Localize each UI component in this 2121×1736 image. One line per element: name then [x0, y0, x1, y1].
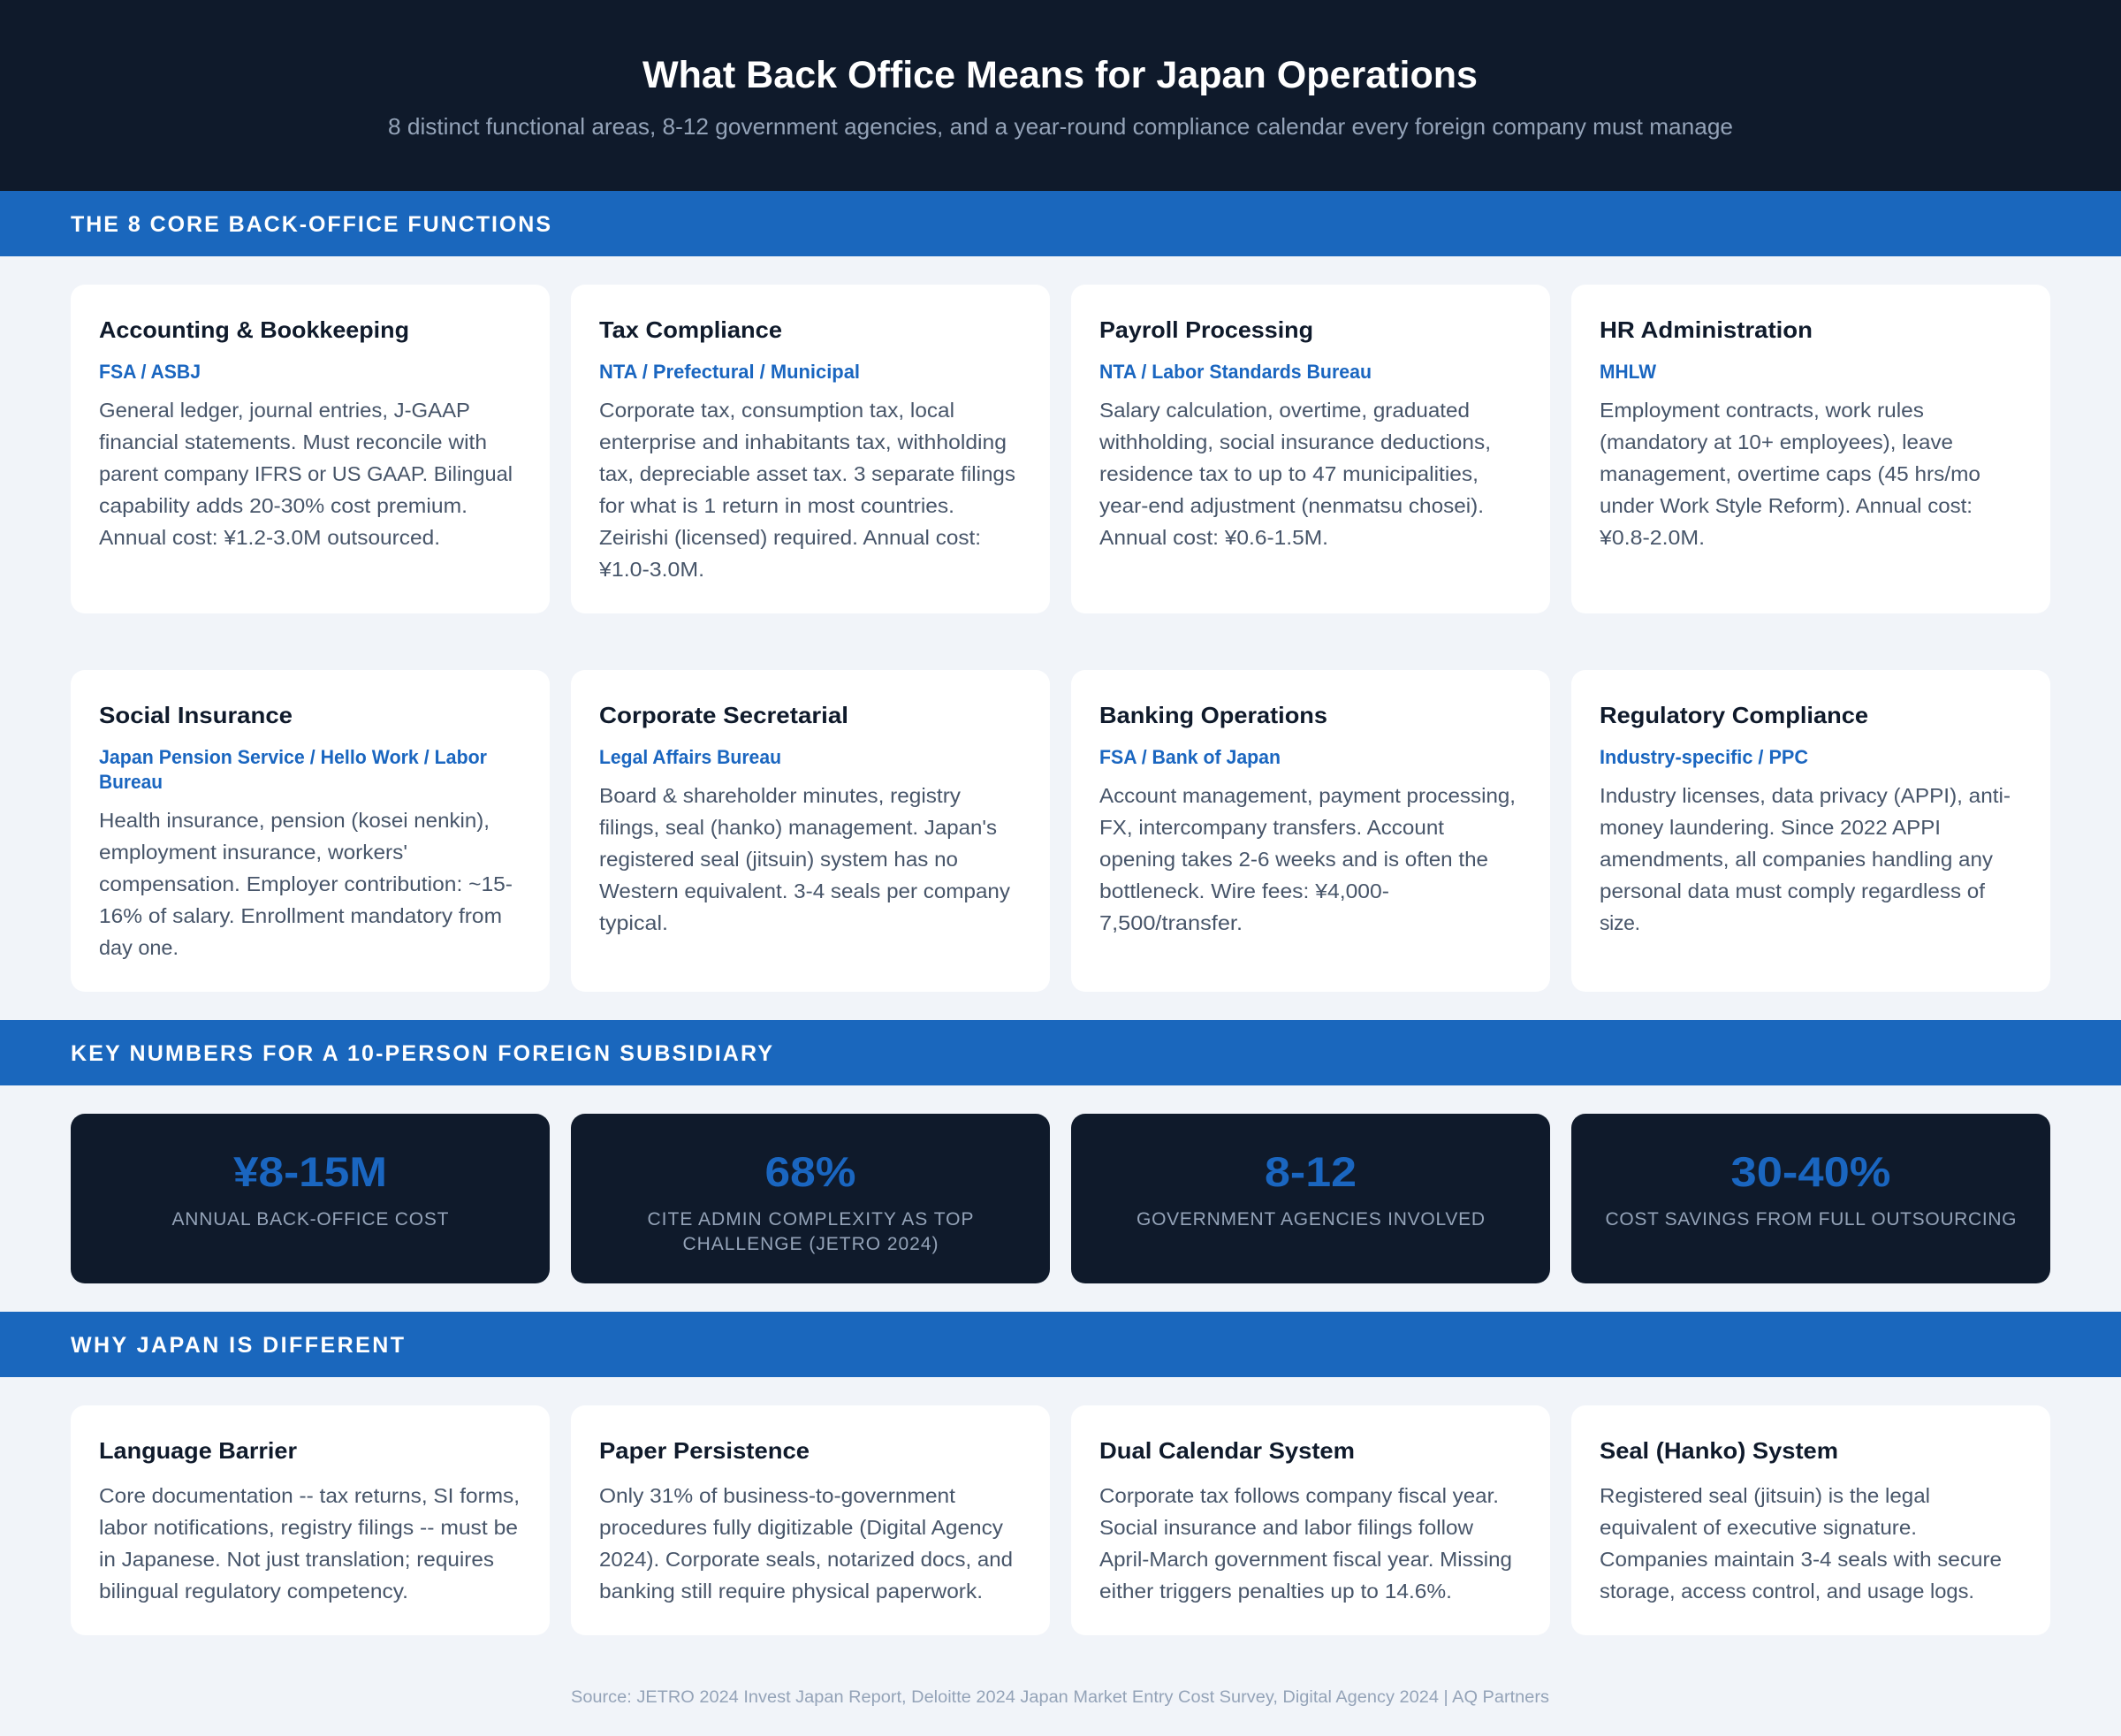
card body: money laundering. Since 2022 APPI: [1600, 816, 1941, 839]
card body: personal data must comply regardless of: [1600, 879, 1986, 902]
card body: April-March government fiscal year. Missing: [1099, 1548, 1512, 1571]
panel: paper persistence: [571, 1405, 1050, 1635]
agency tag: Legal Affairs Bureau: [599, 746, 781, 768]
card body: day one.: [99, 936, 179, 959]
card body: opening takes 2-6 weeks and is often the: [1099, 848, 1488, 871]
header banner: [0, 0, 2121, 191]
stat value: ¥8-15M: [233, 1148, 387, 1195]
section heading: why japan is different: [0, 1312, 2121, 1377]
agency tag: Japan Pension Service / Hello Work / Labor: [99, 746, 487, 768]
card body: 7,500/transfer.: [1099, 911, 1243, 934]
panel: tax compliance: [571, 285, 1050, 613]
card body: amendments, all companies handling any: [1600, 848, 1994, 871]
card body: Zeirishi (licensed) required. Annual cost:: [599, 526, 981, 549]
card body: Only 31% of business-to-government: [599, 1484, 956, 1507]
card body: tax, depreciable asset tax. 3 separate filings: [599, 462, 1015, 485]
stat label: COST SAVINGS FROM FULL OUTSOURCING: [1605, 1209, 2017, 1230]
card title: Accounting & Bookkeeping: [99, 316, 409, 343]
title: What Back Office Means for Japan Operations: [642, 54, 1478, 96]
card body: employment insurance, workers': [99, 841, 407, 864]
card body: financial statements. Must reconcile with: [99, 430, 487, 453]
card body: (mandatory at 10+ employees), leave: [1600, 430, 1953, 453]
card body: [1599, 399, 1980, 549]
panel: seal (hanko) system: [1571, 1405, 2050, 1635]
card body: size.: [1600, 911, 1640, 934]
stat value: 8-12: [1265, 1148, 1357, 1195]
stat card: cost savings: [1571, 1114, 2050, 1283]
card body: Western equivalent. 3-4 seals per company: [599, 879, 1011, 902]
card body: withholding, social insurance deductions,: [1099, 430, 1491, 453]
card title: Banking Operations: [1099, 702, 1327, 728]
panel: dual calendar system: [1071, 1405, 1550, 1635]
agency tag: Bureau: [99, 771, 163, 793]
stat label: [647, 1209, 974, 1254]
card body: Account management, payment processing,: [1099, 784, 1516, 807]
card body: Core documentation -- tax returns, SI forms,: [99, 1484, 520, 1507]
card title: Tax Compliance: [599, 316, 782, 343]
stat label: ANNUAL BACK-OFFICE COST: [171, 1209, 449, 1230]
card body: Companies maintain 3-4 seals with secure: [1600, 1548, 2002, 1571]
card title: Language Barrier: [99, 1437, 297, 1464]
card body: [99, 809, 513, 959]
card body: [599, 784, 1011, 934]
card body: 2024). Corporate seals, notarized docs, and: [599, 1548, 1013, 1571]
card body: equivalent of executive signature.: [1600, 1516, 1917, 1539]
stat card: government agencies: [1071, 1114, 1550, 1283]
card body: procedures fully digitizable (Digital Agency: [599, 1516, 1004, 1539]
agency tag: FSA / ASBJ: [99, 361, 201, 383]
card title: Corporate Secretarial: [599, 702, 848, 728]
stat card: annual cost: [71, 1114, 550, 1283]
card body: ¥1.0-3.0M.: [598, 558, 704, 581]
card title: HR Administration: [1600, 316, 1813, 343]
agency tag: MHLW: [1600, 361, 1656, 383]
card body: parent company IFRS or US GAAP. Bilingual: [99, 462, 513, 485]
panel: accounting and bookkeeping: [71, 285, 550, 613]
card body: Industry licenses, data privacy (APPI), anti-: [1600, 784, 2011, 807]
panel: banking operations: [1071, 670, 1550, 992]
card body: ¥0.8-2.0M.: [1599, 526, 1705, 549]
card title: Payroll Processing: [1099, 316, 1313, 343]
card body: [1099, 1484, 1512, 1603]
card body: Salary calculation, overtime, graduated: [1099, 399, 1470, 422]
card body: [99, 1484, 520, 1603]
card body: in Japanese. Not just translation; requires: [99, 1548, 494, 1571]
card body: Health insurance, pension (kosei nenkin),: [99, 809, 490, 832]
card body: FX, intercompany transfers. Account: [1099, 816, 1445, 839]
stat label: CHALLENGE (JETRO 2024): [682, 1234, 939, 1254]
card body: Social insurance and labor filings follow: [1099, 1516, 1473, 1539]
stat value: 68%: [765, 1148, 855, 1195]
panel: regulatory compliance: [1571, 670, 2050, 992]
card body: [1099, 399, 1491, 549]
panel: hr administration: [1571, 285, 2050, 613]
card body: Corporate tax follows company fiscal year.: [1099, 1484, 1499, 1507]
card body: filings, seal (hanko) management. Japan's: [599, 816, 997, 839]
stat card: admin complexity: [571, 1114, 1050, 1283]
card body: either triggers penalties up to 14.6%.: [1099, 1580, 1452, 1603]
card body: Board & shareholder minutes, registry: [599, 784, 962, 807]
card body: bottleneck. Wire fees: ¥4,000-: [1099, 879, 1389, 902]
card body: management, overtime caps (45 hrs/mo: [1600, 462, 1980, 485]
card body: typical.: [599, 911, 668, 934]
section heading: key numbers: KEY NUMBERS FOR A 10-PERSON FOREIGN SUBSIDIARY: [71, 1041, 772, 1066]
section heading: the 8 core back-office functions: [0, 191, 2121, 256]
card body: registered seal (jitsuin) system has no: [599, 848, 958, 871]
card body: General ledger, journal entries, J-GAAP: [99, 399, 470, 422]
card body: [1600, 1484, 2002, 1603]
card body: [1099, 784, 1516, 934]
card body: Registered seal (jitsuin) is the legal: [1600, 1484, 1930, 1507]
card body: Annual cost: ¥0.6-1.5M.: [1099, 526, 1328, 549]
panel: language barrier: [71, 1405, 550, 1635]
subtitle: 8 distinct functional areas, 8-12 government agencies, and a year-round compliance calendar every foreign company must manage: [388, 113, 1733, 140]
card title: Dual Calendar System: [1099, 1437, 1355, 1464]
card body: 16% of salary. Enrollment mandatory from: [99, 904, 502, 927]
card body: compensation. Employer contribution: ~15-: [99, 872, 513, 895]
card title: Regulatory Compliance: [1600, 702, 1868, 728]
card body: capability adds 20-30% cost premium.: [99, 494, 468, 517]
card body: residence tax to up to 47 municipalities,: [1099, 462, 1479, 485]
card body: storage, access control, and usage logs.: [1600, 1580, 1974, 1603]
card body: year-end adjustment (nenmatsu chosei).: [1099, 494, 1484, 517]
card body: enterprise and inhabitants tax, withholding: [599, 430, 1007, 453]
agency tag: [99, 746, 487, 793]
card body: banking still require physical paperwork.: [599, 1580, 983, 1603]
card body: [99, 399, 513, 549]
agency tag: FSA / Bank of Japan: [1099, 746, 1281, 768]
stat label: CITE ADMIN COMPLEXITY AS TOP: [647, 1209, 974, 1230]
agency tag: NTA / Labor Standards Bureau: [1099, 361, 1372, 383]
source footer: Source: JETRO 2024 Invest Japan Report, Deloitte 2024 Japan Market Entry Cost Survey, Digital Agency 2024 | AQ Partners: [571, 1688, 1549, 1707]
card title: Seal (Hanko) System: [1600, 1437, 1838, 1464]
section heading: the 8 core back-office functions: THE 8 CORE BACK-OFFICE FUNCTIONS: [71, 212, 551, 237]
card body: labor notifications, registry filings -- must be: [99, 1516, 518, 1539]
card body: bilingual regulatory competency.: [99, 1580, 408, 1603]
card title: Social Insurance: [99, 702, 293, 728]
card body: Corporate tax, consumption tax, local: [599, 399, 954, 422]
card body: for what is 1 return in most countries.: [599, 494, 954, 517]
card body: Annual cost: ¥1.2-3.0M outsourced.: [99, 526, 440, 549]
agency tag: NTA / Prefectural / Municipal: [599, 361, 860, 383]
section heading: why japan is different: WHY JAPAN IS DIFFERENT: [71, 1333, 404, 1358]
card body: [599, 1484, 1013, 1603]
card body: [1600, 784, 2011, 934]
stat value: 30-40%: [1730, 1148, 1891, 1195]
stat label: GOVERNMENT AGENCIES INVOLVED: [1137, 1209, 1485, 1230]
card title: Paper Persistence: [599, 1437, 810, 1464]
panel: corporate secretarial: [571, 670, 1050, 992]
card body: Employment contracts, work rules: [1600, 399, 1924, 422]
card body: [598, 399, 1015, 581]
panel: social insurance: [71, 670, 550, 992]
section heading: key numbers: [0, 1020, 2121, 1085]
panel: payroll processing: [1071, 285, 1550, 613]
agency tag: Industry-specific / PPC: [1600, 746, 1808, 768]
card body: under Work Style Reform). Annual cost:: [1600, 494, 1973, 517]
